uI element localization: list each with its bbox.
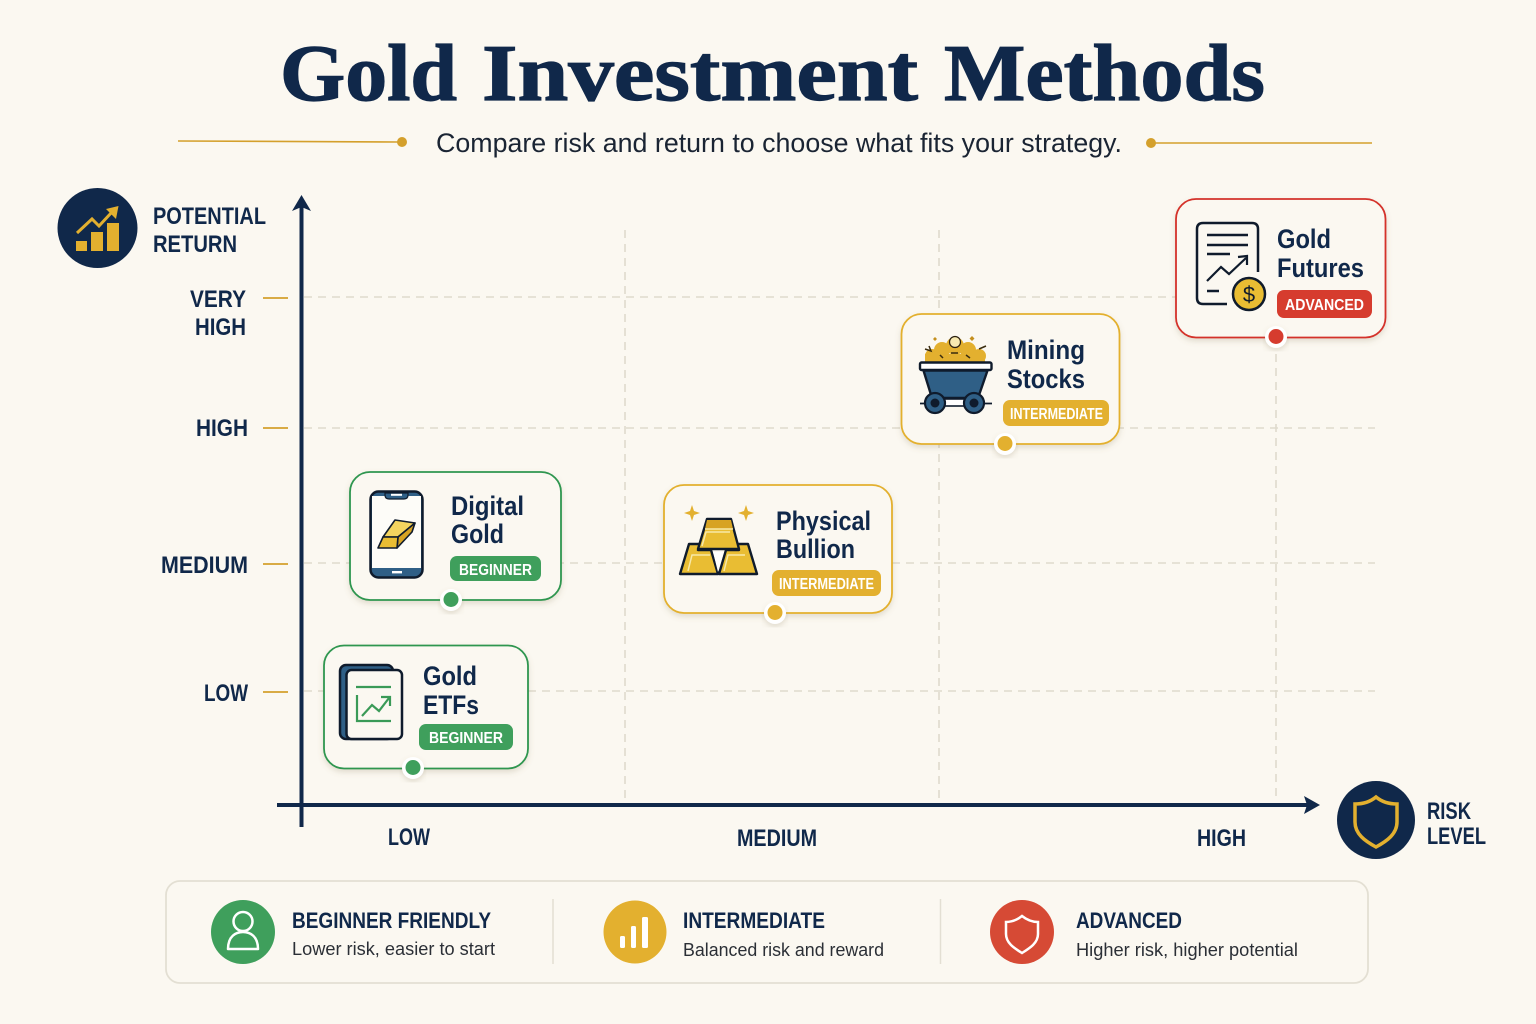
x axis labels: LOW (388, 824, 430, 851)
card: physical bullion: INTERMEDIATE (779, 576, 874, 593)
icon: phone with gold bar (370, 492, 422, 578)
title (280, 28, 1265, 118)
legend: beginner friendly: Lower risk, easier to start (292, 939, 495, 959)
card: physical bullion: Bullion (776, 534, 855, 564)
card: digital gold: Digital (451, 491, 524, 521)
legend: intermediate: INTERMEDIATE (683, 908, 825, 933)
legend: intermediate: Balanced risk and reward (683, 940, 884, 960)
legend: advanced (990, 900, 1298, 964)
icon: futures contract (1197, 223, 1265, 310)
card: gold futures: ADVANCED (1285, 297, 1364, 314)
legend: advanced: ADVANCED (1076, 908, 1182, 933)
icon: gold bars (680, 505, 757, 574)
card: physical bullion: Physical (776, 506, 871, 536)
title: Investment (482, 28, 918, 118)
card: gold futures: Gold (1277, 224, 1331, 254)
card: mining stocks: Mining (1007, 335, 1085, 365)
y axis labels: HIGH (196, 415, 248, 442)
card: digital gold: BEGINNER (459, 562, 532, 579)
legend: beginner friendly (211, 900, 495, 964)
y axis arrow (292, 195, 311, 827)
title: Methods (944, 28, 1265, 118)
axis title: risk level: LEVEL (1427, 823, 1486, 850)
legend: advanced: Higher risk, higher potential (1076, 940, 1298, 960)
y axis labels: LOW (204, 680, 248, 707)
card: mining stocks (902, 314, 1120, 455)
card: gold futures: Futures (1277, 253, 1364, 283)
card: mining stocks: INTERMEDIATE (1010, 406, 1103, 423)
subtitle with gold rules: Compare risk and return to choose what fits your strategy. (436, 128, 1122, 158)
axis title: potential return (153, 203, 266, 258)
icon: risk level (1337, 781, 1415, 859)
legend: intermediate (604, 900, 884, 964)
card: digital gold (350, 472, 561, 611)
y axis labels: MEDIUM (161, 552, 248, 579)
y axis labels: HIGH (195, 314, 246, 341)
axis title: risk level (1427, 798, 1486, 850)
axis title: risk level: RISK (1427, 798, 1472, 825)
legend: beginner friendly: BEGINNER FRIENDLY (292, 908, 491, 933)
title: Gold (280, 28, 457, 118)
card: mining stocks: Stocks (1007, 364, 1085, 394)
subtitle with gold rules (178, 128, 1372, 158)
icon: mine cart (920, 336, 992, 413)
axis title: potential return: POTENTIAL (153, 203, 266, 230)
icon: potential return (58, 188, 138, 268)
x axis labels (388, 824, 1246, 852)
card: gold ETFs: BEGINNER (429, 730, 503, 747)
icon: futures contract: $ (1243, 282, 1255, 307)
card: digital gold: Gold (451, 519, 504, 549)
card: gold ETFs (324, 646, 528, 779)
axis title: potential return: RETURN (153, 231, 237, 258)
x axis labels: HIGH (1197, 825, 1246, 852)
legend panel (166, 881, 1368, 983)
card: gold futures (1176, 199, 1386, 348)
card: physical bullion (664, 485, 892, 624)
card: gold ETFs: Gold (423, 661, 477, 691)
x axis arrow (277, 796, 1320, 814)
icon: ETF document (340, 665, 402, 739)
y axis labels (161, 286, 288, 707)
card: gold ETFs: ETFs (423, 690, 479, 720)
x axis labels: MEDIUM (737, 825, 817, 852)
y axis labels: VERY (190, 286, 246, 313)
